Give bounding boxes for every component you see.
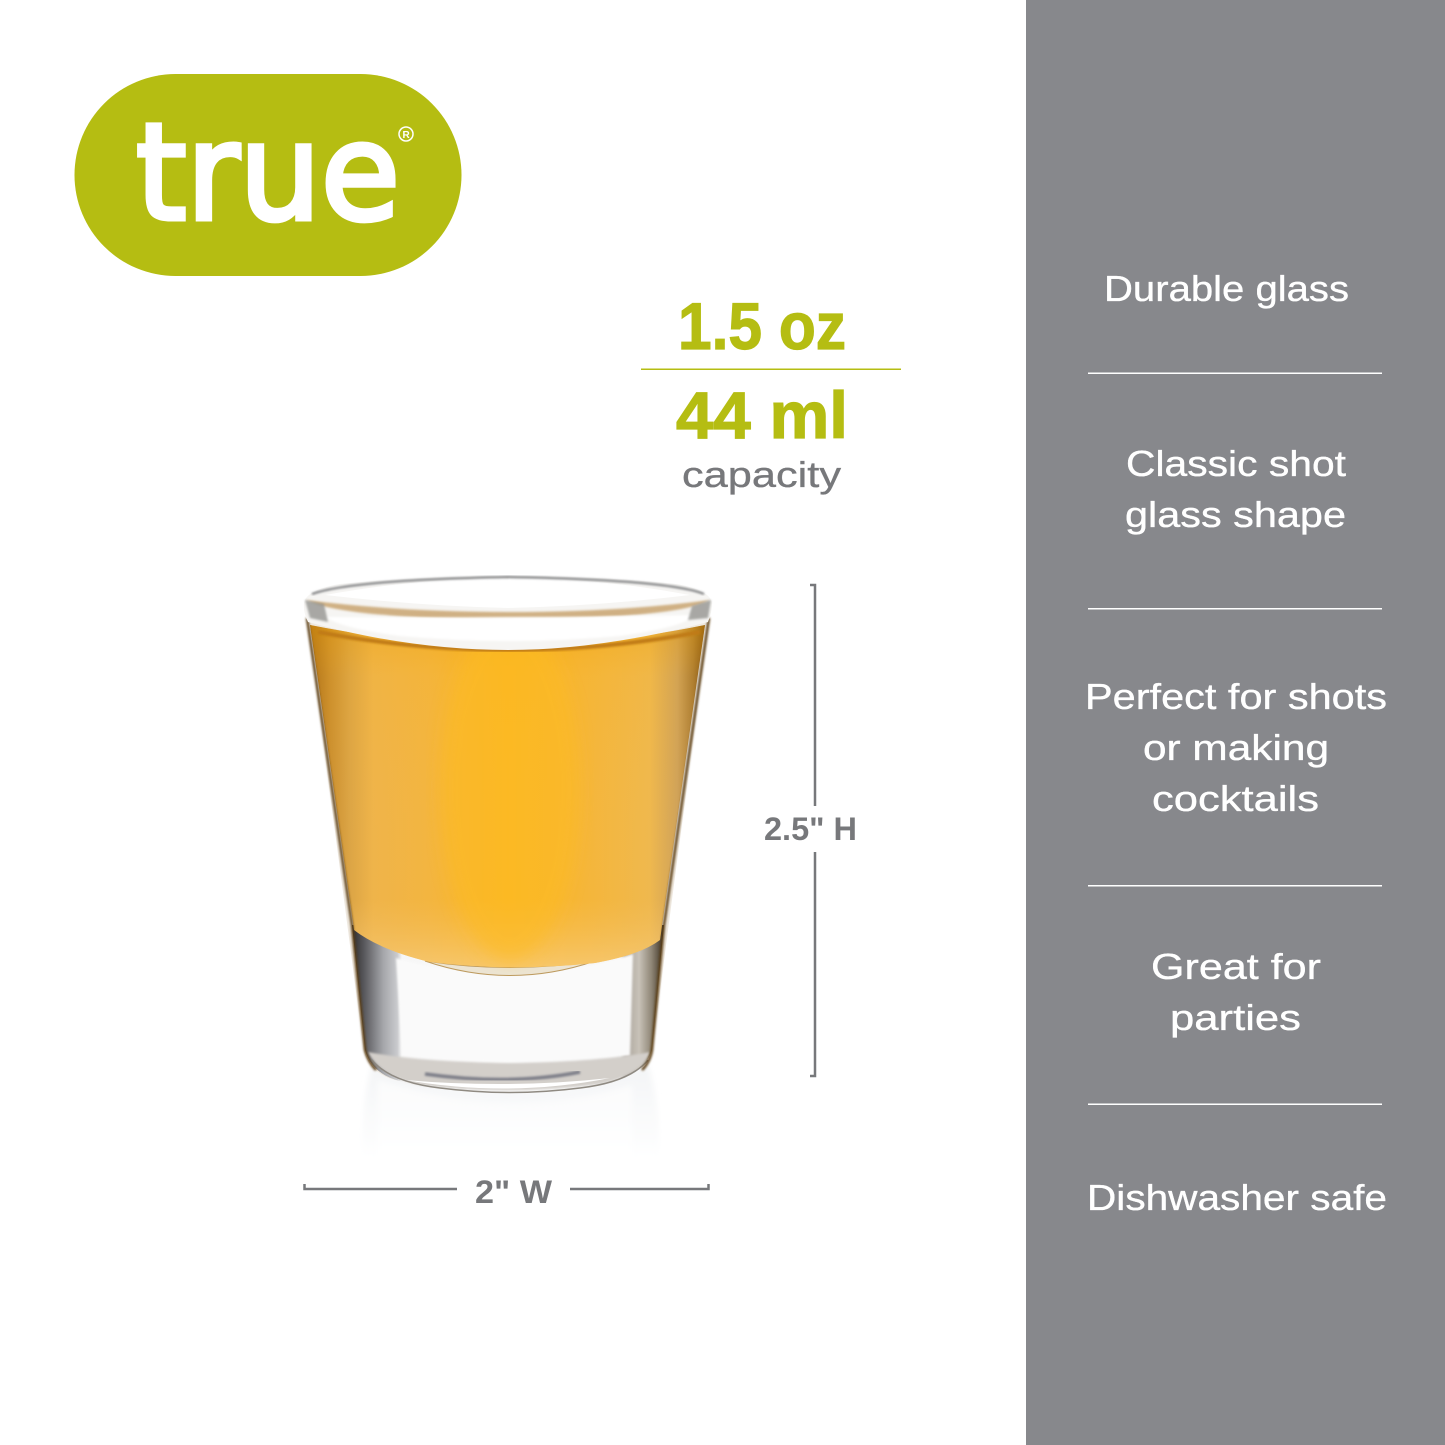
feature: parties: parties — [1170, 997, 1301, 1038]
panel: features — [1026, 0, 1445, 1445]
base foot ring — [368, 1052, 650, 1090]
rim back edge — [312, 577, 704, 594]
rim front band — [306, 600, 710, 620]
glass body — [307, 618, 709, 1093]
feature: shots or cocktails: cocktails — [1152, 778, 1319, 819]
feature: shots or cocktails — [1085, 676, 1387, 819]
feature: classic shape: glass shape — [1125, 494, 1346, 535]
feature: classic shape: Classic shot — [1126, 443, 1346, 484]
height dimension: 2.5" H — [764, 811, 857, 847]
feature: parties: Great for — [1151, 946, 1321, 987]
capacity callout: 44 ml — [676, 378, 848, 452]
feature: durable glass: Durable glass — [1104, 268, 1349, 309]
rim inner white — [325, 578, 690, 608]
feature: parties — [1151, 946, 1321, 1038]
base bright centre — [396, 954, 633, 1061]
shot glass — [304, 576, 712, 1093]
feature: shots or cocktails: Perfect for shots — [1085, 676, 1387, 717]
glass base — [352, 925, 664, 1093]
rim white band — [326, 615, 692, 641]
logo: true: true — [136, 95, 400, 251]
liquid — [310, 625, 705, 967]
rim side glints — [305, 600, 328, 622]
width dimension: 2" W — [475, 1174, 553, 1210]
capacity callout: 1.5 oz — [678, 289, 846, 363]
feature: dishwasher safe: Dishwasher safe — [1087, 1177, 1387, 1218]
feature: classic shape — [1125, 443, 1346, 535]
lens under liquid — [425, 961, 595, 976]
liquid centre glow — [440, 620, 580, 960]
glass reflection — [361, 1065, 660, 1165]
logo: true — [74, 74, 462, 276]
rim — [304, 576, 712, 650]
height dimension — [764, 585, 857, 1076]
capacity callout — [641, 289, 901, 495]
feature: shots or cocktails: or making — [1143, 727, 1329, 768]
liquid surface line — [318, 632, 700, 650]
logo: true: R — [402, 130, 410, 141]
width dimension — [304, 1174, 708, 1210]
capacity callout: capacity — [682, 454, 841, 495]
left and right edges — [307, 618, 376, 1070]
